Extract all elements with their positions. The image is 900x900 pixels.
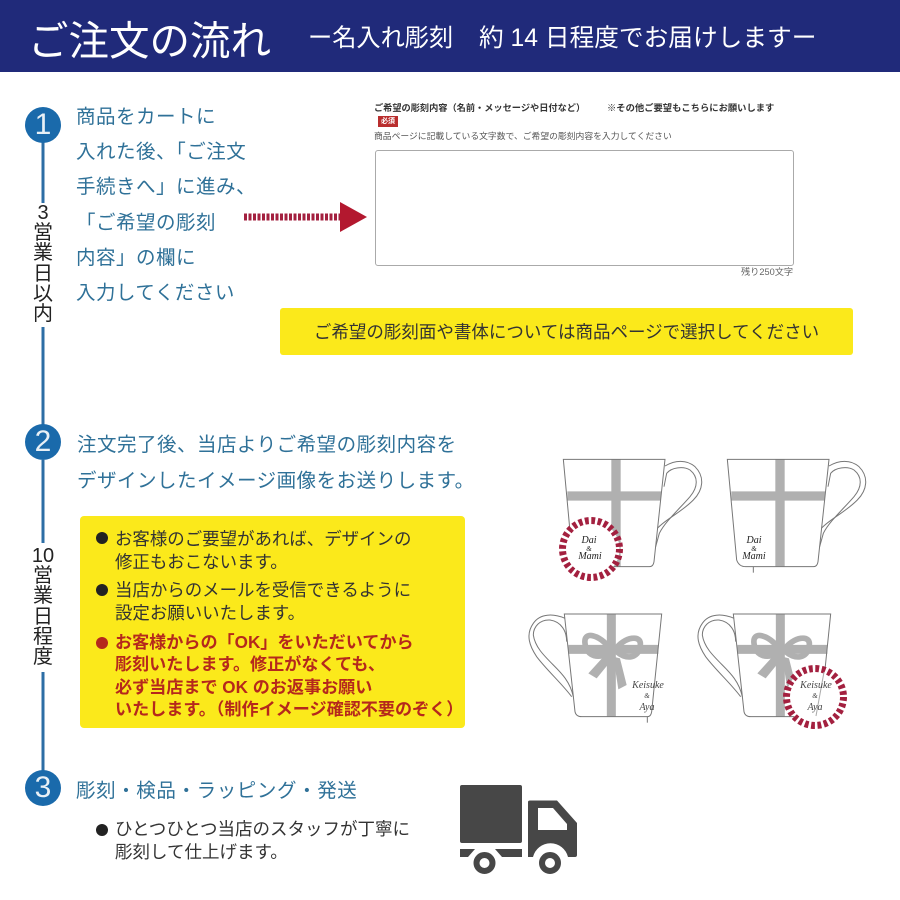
mug 2: & bbox=[751, 545, 757, 553]
note 2 bbox=[115, 580, 411, 623]
step 1 duration: 以 bbox=[33, 283, 53, 305]
form note: ※その他ご要望もこちらにお願いします bbox=[607, 103, 774, 113]
step 2 text: 注文完了後、当店よりご希望の彫刻内容を bbox=[77, 434, 457, 456]
mug 1: Mami bbox=[577, 551, 602, 562]
step 1 text: 商品をカートに bbox=[76, 106, 216, 128]
icon: truck bbox=[460, 785, 577, 874]
note 1: お客様のご要望があれば、デザインの bbox=[115, 529, 411, 549]
step 1 text: 手続きへ」に進み、 bbox=[76, 176, 256, 198]
step 1 number bbox=[25, 107, 61, 143]
step 1 duration bbox=[33, 202, 53, 325]
mug 3: Keisuke bbox=[631, 680, 664, 691]
note 3 bbox=[115, 633, 463, 719]
form screenshot bbox=[374, 102, 794, 277]
step 1 text: 入力してください bbox=[76, 282, 235, 304]
arrow bbox=[244, 202, 367, 232]
step 1 text: 内容」の欄に bbox=[76, 247, 196, 269]
step 1 duration: 業 bbox=[33, 242, 53, 264]
header banner bbox=[0, 0, 900, 72]
step 2 duration: 営 bbox=[33, 565, 53, 587]
mug 4 bbox=[698, 614, 844, 726]
step 2 duration: 10 bbox=[32, 545, 54, 567]
note 2: 当店からのメールを受信できるように bbox=[115, 580, 411, 600]
step 3 text: ひとつひとつ当店のスタッフが丁寧に bbox=[115, 819, 410, 839]
step 3 number bbox=[25, 770, 61, 806]
mug 4: & bbox=[812, 692, 818, 700]
yellow notice bar: ご希望の彫刻面や書体については商品ページで選択してください bbox=[314, 322, 819, 342]
mug 1: & bbox=[586, 545, 592, 553]
note 1 bbox=[115, 529, 411, 572]
step 2 duration: 業 bbox=[33, 585, 53, 607]
step 3 text bbox=[115, 819, 410, 862]
yellow notice bar bbox=[280, 308, 853, 355]
step 1 text: 入れた後、「ご注文 bbox=[76, 141, 246, 163]
step 3 number: 3 bbox=[35, 771, 51, 804]
note 3: お客様からの「OK」をいただいてから bbox=[115, 633, 414, 652]
timeline line bbox=[42, 142, 44, 770]
step 2 duration bbox=[32, 545, 54, 668]
required tag: 必須 bbox=[381, 118, 395, 125]
step 2 duration: 日 bbox=[33, 606, 53, 628]
yellow notes panel bbox=[80, 516, 465, 728]
mug 3 bbox=[529, 614, 664, 723]
form help text: 商品ページに記載している文字数で、ご希望の彫刻内容を入力してください bbox=[374, 131, 672, 141]
note 3: いたします。（制作イメージ確認不要のぞく） bbox=[115, 700, 463, 719]
step 2 duration: 程 bbox=[33, 626, 53, 648]
title: ご注文の流れ bbox=[28, 18, 271, 64]
note 3: 必ず当店まで OK のお返事お願い bbox=[115, 678, 372, 697]
note 1: 修正もおこないます。 bbox=[115, 552, 288, 572]
note 2: 設定お願いいたします。 bbox=[115, 603, 305, 623]
bullet 2 bbox=[96, 584, 108, 596]
bullet 1 bbox=[96, 532, 108, 544]
note 3: 彫刻いたします。修正がなくても、 bbox=[115, 655, 385, 674]
step 3 heading: 彫刻・検品・ラッピング・発送 bbox=[76, 780, 357, 802]
bullet bbox=[96, 824, 108, 836]
step 1 duration: 3 bbox=[37, 202, 49, 224]
bullet 3 bbox=[96, 637, 108, 649]
step 1 duration: 日 bbox=[33, 263, 53, 285]
required tag bbox=[378, 116, 398, 127]
step 3 text: 彫刻して仕上げます。 bbox=[115, 842, 288, 862]
subtitle: engraving: ー名入れ彫刻 bbox=[308, 25, 453, 52]
mug 1 bbox=[562, 459, 702, 578]
form label: ご希望の彫刻内容（名前・メッセージや日付など） bbox=[374, 103, 585, 113]
mug 2: Mami bbox=[741, 551, 766, 562]
mug 1: Dai bbox=[580, 535, 597, 546]
mug 2: Dai bbox=[746, 535, 762, 546]
step 2 number bbox=[25, 424, 61, 460]
step 1 number: 1 bbox=[35, 108, 51, 141]
mug 3: Aya bbox=[638, 702, 654, 713]
step 2 number: 2 bbox=[35, 425, 51, 458]
mug illustrations bbox=[528, 458, 866, 729]
subtitle: lead time: 約 14 日程度でお届けしますー bbox=[479, 25, 816, 52]
step 2 duration: 度 bbox=[33, 646, 53, 668]
step 1 text: 「ご希望の彫刻 bbox=[76, 212, 216, 234]
step 1 duration: 内 bbox=[33, 303, 53, 325]
text area bbox=[375, 150, 794, 266]
step 1 text bbox=[76, 106, 256, 304]
mug 2 bbox=[727, 459, 866, 573]
step 2 text bbox=[77, 434, 475, 492]
mug 4: Aya bbox=[806, 702, 822, 713]
step 1 duration: 営 bbox=[33, 222, 53, 244]
mug 4: Keisuke bbox=[799, 680, 832, 691]
step 2 text: デザインしたイメージ画像をお送りします。 bbox=[77, 470, 475, 492]
mug 3: & bbox=[644, 692, 650, 700]
character count: 残り250文字 bbox=[741, 267, 793, 277]
